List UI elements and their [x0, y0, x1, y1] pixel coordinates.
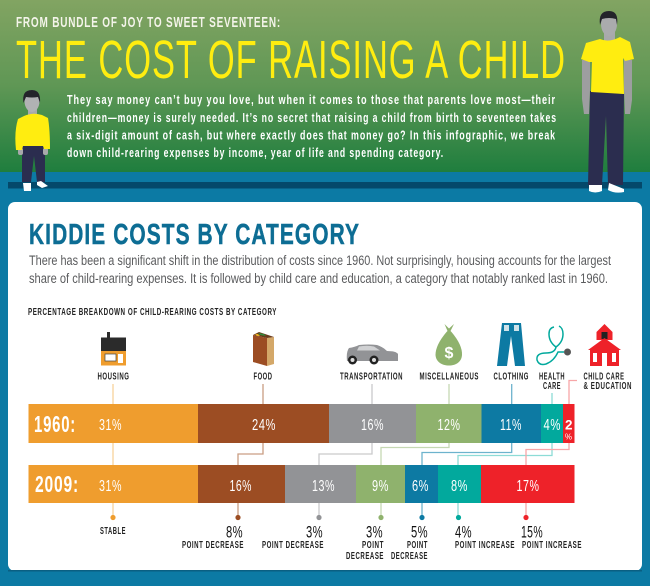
change labels: POINT INCREASE	[522, 540, 582, 551]
panel: kiddie costs by category	[8, 202, 642, 572]
change labels: POINT	[407, 540, 428, 551]
change labels: POINT DECREASE	[182, 540, 244, 551]
illustration: adult	[581, 11, 634, 193]
change labels: STABLE	[100, 526, 126, 537]
change labels: 4%	[455, 522, 472, 542]
category labels	[98, 372, 632, 392]
year label 1960: 1960:	[34, 411, 76, 437]
change labels	[100, 522, 582, 562]
intro text: down child-rearing expenses by income, year of life and spending category.	[67, 146, 444, 160]
category labels: CLOTHING	[494, 372, 529, 382]
change labels: POINT INCREASE	[455, 540, 515, 551]
stacked bar: 2009: 13%	[312, 478, 335, 495]
stacked bar: 2009: 6%	[412, 478, 429, 495]
category labels: TRANSPORTATION	[340, 372, 403, 382]
change labels: DECREASE	[346, 551, 384, 562]
header background	[0, 0, 650, 172]
stacked bar: 2009: 31%	[99, 478, 122, 495]
heading: KIDDIE COSTS BY CATEGORY	[29, 219, 360, 251]
stacked bar: 1960: 24%	[252, 417, 276, 434]
change labels: POINT DECREASE	[262, 540, 324, 551]
stacked bar: 2009: 17%	[516, 478, 540, 495]
icon: food bag	[253, 332, 274, 366]
category labels: CARE	[543, 381, 561, 392]
stacked bar: 1960	[28, 404, 574, 443]
icon: jeans	[497, 323, 525, 366]
stacked bar: 1960: %	[565, 432, 572, 442]
stacked bar: 1960: 2	[565, 418, 572, 432]
icon: house	[101, 332, 126, 366]
change labels: 3%	[366, 522, 383, 542]
change labels: 5%	[411, 522, 428, 542]
change labels: 8%	[226, 522, 243, 542]
stacked bar: 2009: 8%	[451, 478, 468, 495]
stacked bar: 1960: 4%	[544, 417, 561, 434]
change labels: 3%	[306, 522, 323, 542]
change labels: 15%	[521, 522, 543, 542]
illustration: child	[15, 90, 50, 191]
year label 2009: 2009:	[35, 471, 79, 497]
stacked bar: 2009: 16%	[230, 478, 252, 495]
icon: money bag: $	[445, 345, 454, 362]
stacked bar: 1960: 16%	[361, 417, 384, 434]
change labels: DECREASE	[391, 551, 428, 562]
category labels: MISCELLANEOUS	[420, 372, 479, 382]
subtitle: FROM BUNDLE OF JOY TO SWEET SEVENTEEN:	[16, 14, 281, 31]
category labels: FOOD	[254, 372, 272, 382]
icon: schoolhouse	[588, 324, 621, 366]
stacked bar: 1960: 12%	[438, 417, 460, 434]
stacked bar: 2009	[28, 465, 574, 503]
icon: car	[347, 344, 398, 364]
category labels: HEALTH	[539, 372, 565, 382]
icon: stethoscope	[537, 326, 571, 364]
category labels: HOUSING	[98, 372, 130, 382]
change labels: POINT	[362, 540, 384, 551]
intro text	[67, 93, 557, 160]
connector lines	[113, 380, 577, 517]
chart subheading: PERCENTAGE BREAKDOWN OF CHILD-REARING COSTS BY CATEGORY	[28, 307, 277, 318]
icon: money bag	[436, 324, 462, 366]
change markers	[110, 515, 529, 520]
stacked bar: 2009: 9%	[372, 478, 389, 495]
stacked bar: 1960: 31%	[99, 417, 122, 434]
stacked bar: 1960: 11%	[500, 417, 522, 434]
description	[29, 253, 611, 286]
